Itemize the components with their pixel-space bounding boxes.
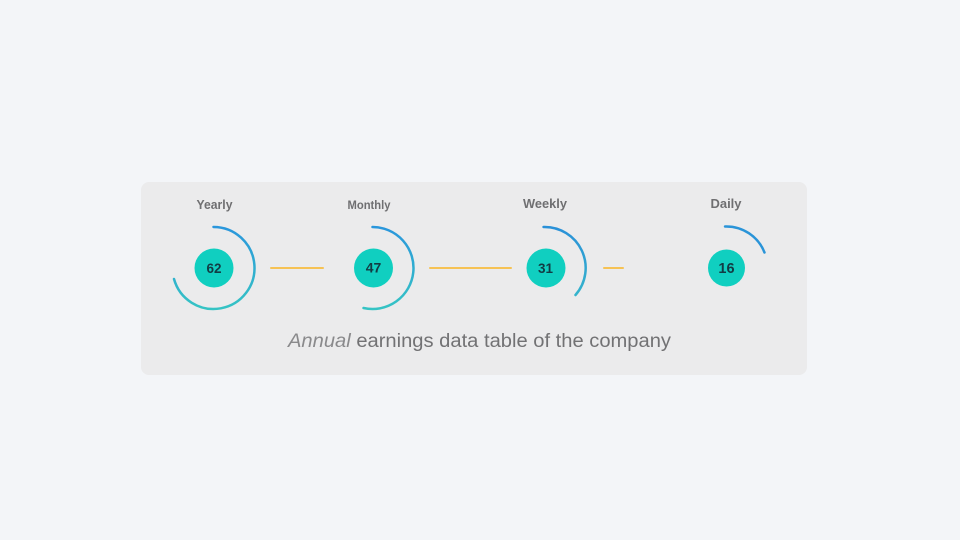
connector: monthly to weekly bbox=[430, 267, 511, 269]
label: Weekly: Weekly bbox=[523, 196, 568, 211]
label: Yearly: Yearly bbox=[196, 198, 233, 212]
progress ring: weekly bbox=[544, 227, 586, 295]
value badge: 62 bbox=[194, 248, 234, 288]
value badge: 47 bbox=[354, 248, 393, 288]
value badge: 62: 62 bbox=[206, 261, 222, 276]
value badge: 16: 16 bbox=[718, 261, 735, 277]
progress ring: monthly bbox=[364, 227, 414, 309]
value badge: 16 bbox=[708, 250, 745, 286]
value badge: 47: 47 bbox=[366, 260, 381, 276]
progress ring: yearly bbox=[174, 227, 254, 309]
caption: Annual earnings data table of the company bbox=[287, 331, 672, 352]
progress ring: daily bbox=[725, 226, 764, 252]
label: Daily: Daily bbox=[710, 196, 742, 211]
value badge: 31: 31 bbox=[538, 261, 553, 276]
connector: weekly to daily bbox=[604, 267, 623, 269]
panel: earnings card bbox=[141, 182, 807, 375]
label: Monthly: Monthly bbox=[348, 200, 391, 212]
value badge: 31 bbox=[526, 248, 566, 288]
connector: yearly to monthly bbox=[271, 267, 323, 269]
